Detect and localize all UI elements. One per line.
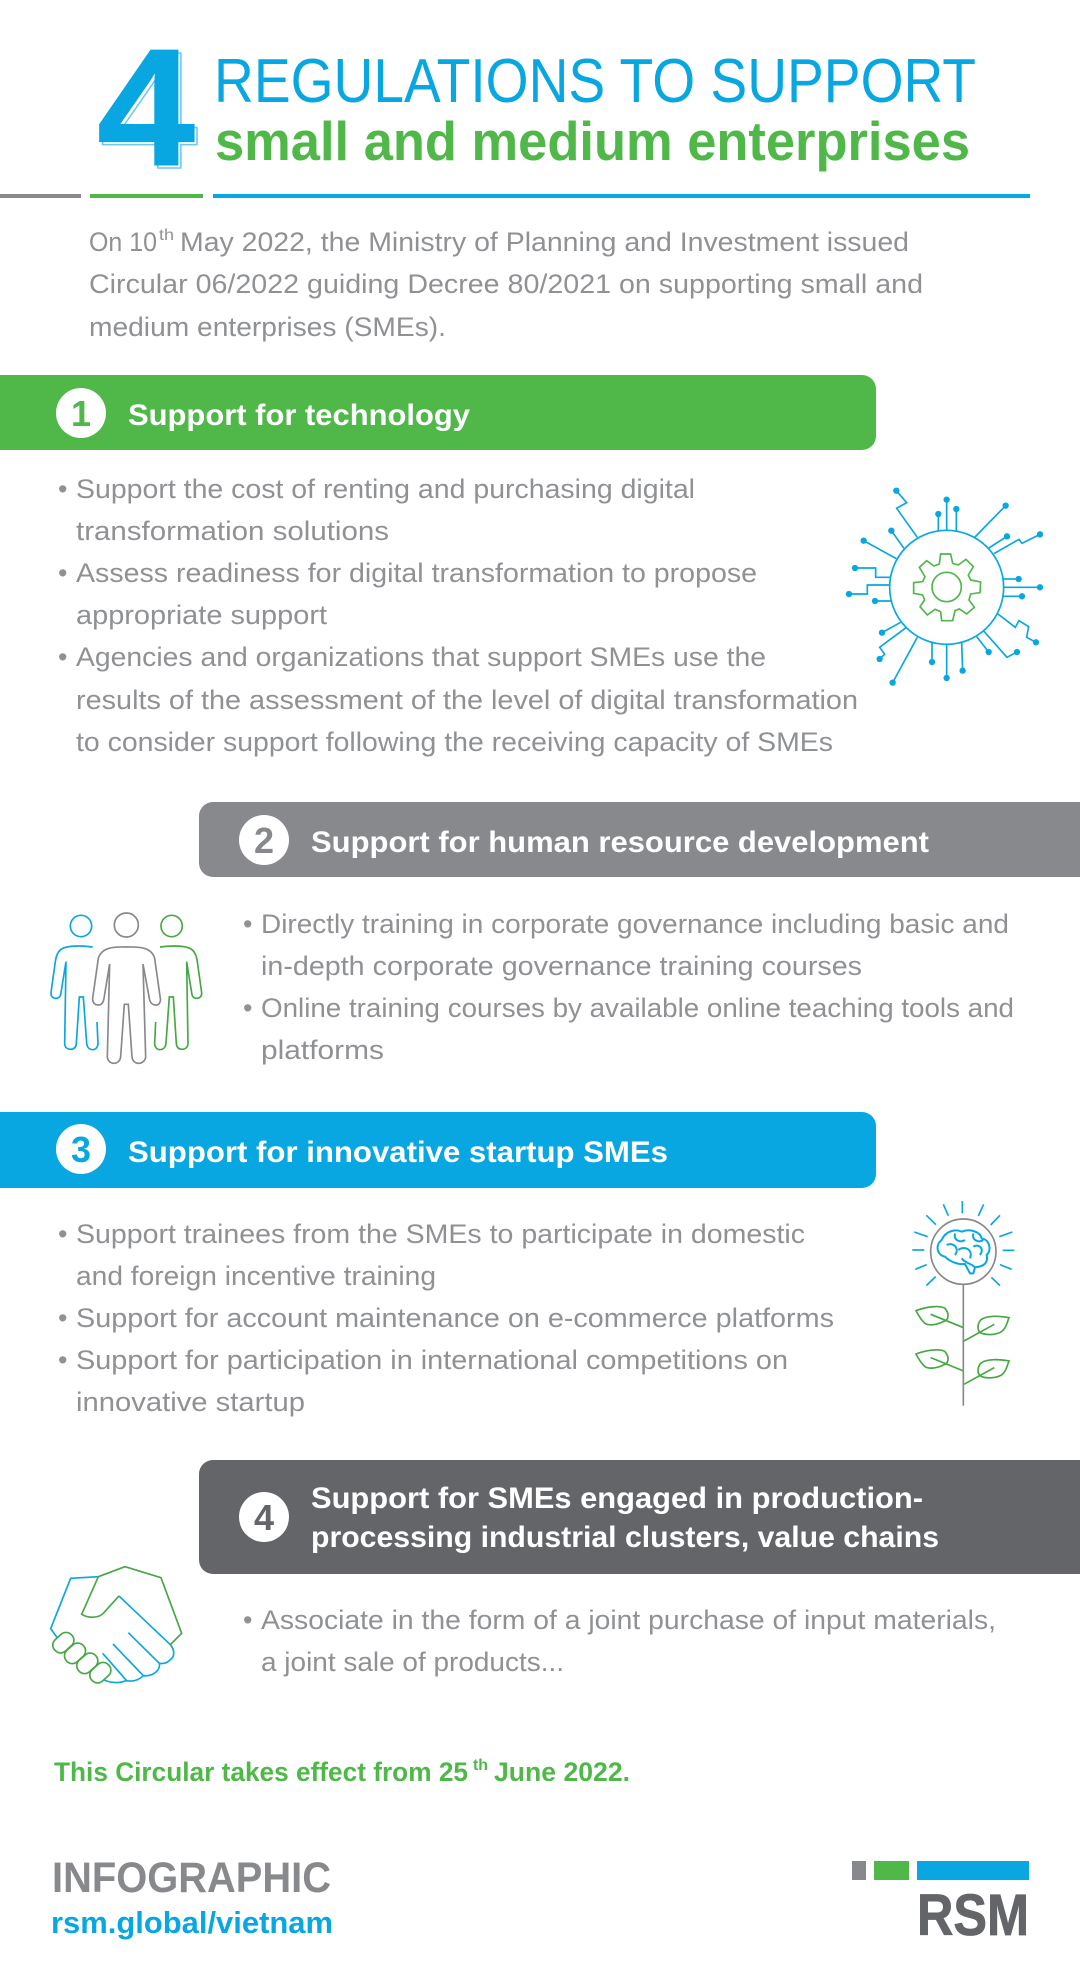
bullet list 3: • [58, 1345, 67, 1375]
bullet list 1: appropriate support [76, 600, 328, 630]
heading bar 3: Support for innovative startup SMEs [128, 1136, 668, 1169]
bullet list 3: • [58, 1219, 67, 1249]
header rule [0, 194, 1030, 198]
bullet list 4 [243, 1605, 996, 1677]
bullet list 1: • [58, 558, 67, 588]
icon: three people [51, 913, 202, 1063]
bullet list 3: Support for participation in international competitions on [76, 1345, 788, 1375]
bullet list 2: platforms [261, 1035, 384, 1065]
bullet list 2: in-depth corporate governance training courses [261, 951, 862, 981]
bullet list 2: Online training courses by available online teaching tools and [261, 993, 1014, 1023]
header [97, 15, 976, 204]
bullet list 1: results of the assessment of the level of digital transformation [76, 685, 858, 715]
heading bar 1: 1 [71, 393, 91, 434]
heading bar 1: Support for technology [128, 399, 470, 432]
footer label [51, 1854, 333, 1940]
bullet list 4: Associate in the form of a joint purchase of input materials, [261, 1605, 996, 1635]
heading bar 2: Support for human resource development [311, 826, 929, 859]
bullet list 1: Agencies and organizations that support SMEs use the [76, 642, 766, 672]
bullet list 3 [58, 1219, 834, 1417]
heading bar 3: 3 [71, 1129, 91, 1170]
bullet list 1: • [58, 474, 67, 504]
panel: support for technology [0, 375, 1043, 757]
intro text: May 2022, the Ministry of Planning and Investment issued [180, 227, 909, 257]
heading bar 2 [199, 802, 1080, 877]
bullet list 1: transformation solutions [76, 516, 389, 546]
RSM logo: RSM [917, 1883, 1029, 1948]
bullet list 2 [243, 909, 1014, 1065]
title line 1: REGULATIONS TO SUPPORT [214, 47, 976, 116]
bullet list 3: innovative startup [76, 1387, 305, 1417]
heading bar 4: 4 [254, 1497, 274, 1538]
bullet list 3: Support trainees from the SMEs to participate in domestic [76, 1219, 805, 1249]
icon: brain plant [912, 1201, 1014, 1406]
effective date note: June 2022. [494, 1757, 630, 1787]
intro text: Circular 06/2022 guiding Decree 80/2021 on supporting small and [89, 269, 923, 299]
bullet list 2: Directly training in corporate governance including basic and [261, 909, 1009, 939]
heading bar 4 [199, 1460, 1080, 1574]
bullet list 1 [58, 474, 858, 757]
heading bar 3 [0, 1112, 876, 1188]
heading bar 2: 2 [254, 820, 274, 861]
big numeral 4: 4 [97, 15, 195, 201]
title line 2: small and medium enterprises [215, 110, 970, 172]
heading bar 1 [0, 375, 876, 450]
effective date note: This Circular takes effect from 25 [54, 1757, 468, 1787]
panel: support for human resource development [51, 802, 1080, 1065]
footer label: rsm.global/vietnam [51, 1905, 333, 1940]
heading bar 4: processing industrial clusters, value chains [311, 1521, 939, 1554]
intro text: On 10 [89, 227, 157, 257]
bullet list 1: • [58, 642, 67, 672]
panel: support for SMEs in clusters and value chains [50, 1460, 1080, 1686]
big numeral 4: 4 [100, 18, 198, 204]
bullet list 3: and foreign incentive training [76, 1261, 436, 1291]
intro text: medium enterprises (SMEs). [89, 312, 446, 342]
bullet list 3: Support for account maintenance on e-commerce platforms [76, 1303, 834, 1333]
icon: handshake [50, 1567, 182, 1686]
footer label: INFOGRAPHIC [52, 1854, 331, 1902]
bullet list 1: to consider support following the receiving capacity of SMEs [76, 727, 833, 757]
bullet list 2: • [243, 909, 252, 939]
icon: circuit gear [846, 487, 1043, 686]
intro text: th [159, 227, 174, 244]
bullet list 4: a joint sale of products... [261, 1647, 564, 1677]
intro text [89, 227, 923, 342]
bullet list 1: Support the cost of renting and purchasing digital [76, 474, 695, 504]
bullet list 2: • [243, 993, 252, 1023]
panel: support for innovative startup SMEs [0, 1112, 1014, 1417]
RSM logo [852, 1861, 1029, 1948]
bullet list 3: • [58, 1303, 67, 1333]
effective date note: th [473, 1757, 488, 1774]
bullet list 1: Assess readiness for digital transformation to propose [76, 558, 757, 588]
bullet list 4: • [243, 1605, 252, 1635]
heading bar 4: Support for SMEs engaged in production- [311, 1482, 923, 1515]
